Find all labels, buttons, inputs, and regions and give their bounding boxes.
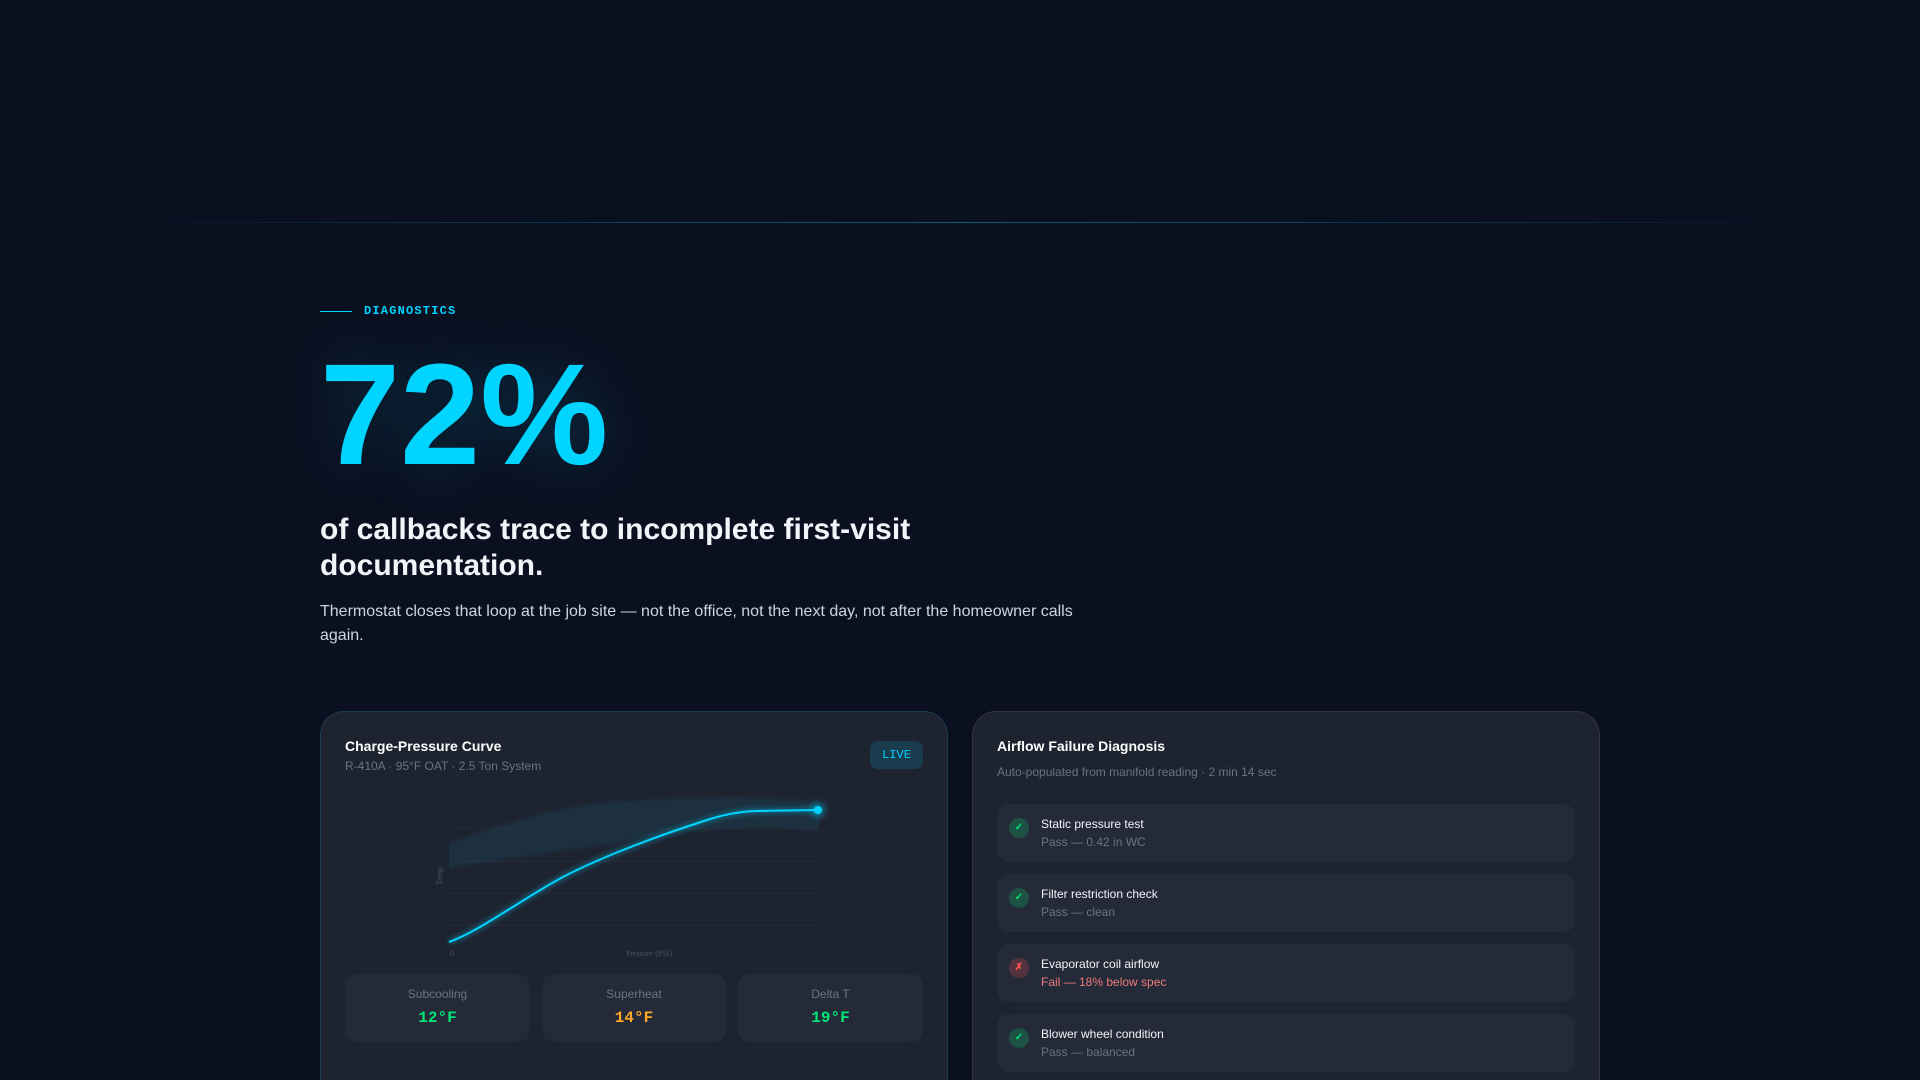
axis labels (435, 867, 672, 958)
stat: superheat: Superheat (606, 987, 662, 1001)
check item: static pressure: ✓ (1015, 822, 1023, 833)
check item: blower wheel: Blower wheel condition (1041, 1027, 1164, 1041)
check item: blower wheel: Pass — balanced (1041, 1045, 1135, 1059)
axis labels: Pressure (PSI) (626, 949, 672, 958)
stat: subcooling: 12°F (418, 1009, 457, 1027)
check item: static pressure: Static pressure test (1041, 817, 1144, 831)
check item: static pressure: Pass — 0.42 in WC (1041, 835, 1146, 849)
check item: filter restriction: Filter restriction check (1041, 887, 1158, 901)
badge: live (870, 741, 923, 769)
check item: filter restriction (997, 874, 1575, 932)
stat: delta t: Delta T (811, 987, 850, 1001)
target band (440, 797, 830, 870)
check item: blower wheel (997, 1014, 1575, 1072)
panel heading: charge-pressure curve: Charge-Pressure Curve (345, 738, 501, 754)
badge: live: LIVE (882, 748, 911, 762)
stat: subcooling: Subcooling (408, 987, 467, 1001)
axis labels: 0 (450, 949, 454, 958)
subheading: of callbacks trace to incomplete first-visit documentation. (320, 513, 910, 582)
stat: superheat: 14°F (615, 1009, 653, 1027)
check item: evaporator coil: Evaporator coil airflow (1041, 957, 1159, 971)
curve glow (449, 810, 817, 942)
stat: delta t (738, 974, 923, 1042)
curve (449, 810, 817, 942)
panel subtitle: Auto-populated from manifold reading · 2 min 14 sec (997, 765, 1276, 779)
panel: charge-pressure curve (320, 711, 948, 1080)
line chart: charge-pressure curve (435, 798, 829, 958)
stat: delta t: 19°F (811, 1009, 850, 1027)
top divider line (96, 222, 1824, 223)
check item: evaporator coil: ✗ (1015, 962, 1023, 973)
stat: superheat (542, 974, 726, 1042)
stat: subcooling (345, 974, 530, 1042)
body paragraph: Thermostat closes that loop at the job site — not the office, not the next day, not after the homeowner calls again. (320, 603, 1073, 644)
panel heading: airflow failure diagnosis: Airflow Failure Diagnosis (997, 738, 1165, 754)
panel: airflow failure diagnosis (972, 711, 1600, 1080)
check item: blower wheel: ✓ (1015, 1032, 1023, 1043)
end point (812, 804, 824, 816)
check item: evaporator coil: Fail — 18% below spec (1041, 975, 1166, 989)
panel subtitle: R-410A · 95°F OAT · 2.5 Ton System (345, 759, 541, 773)
check item: filter restriction: Pass — clean (1041, 905, 1115, 919)
headline stat: 72%: 72% (320, 334, 608, 495)
check item: evaporator coil (997, 944, 1575, 1002)
check item: static pressure (997, 804, 1575, 862)
eyebrow: diagnostics: DIAGNOSTICS (364, 304, 456, 318)
axis labels: Temp (435, 867, 444, 885)
check item: filter restriction: ✓ (1015, 892, 1023, 903)
